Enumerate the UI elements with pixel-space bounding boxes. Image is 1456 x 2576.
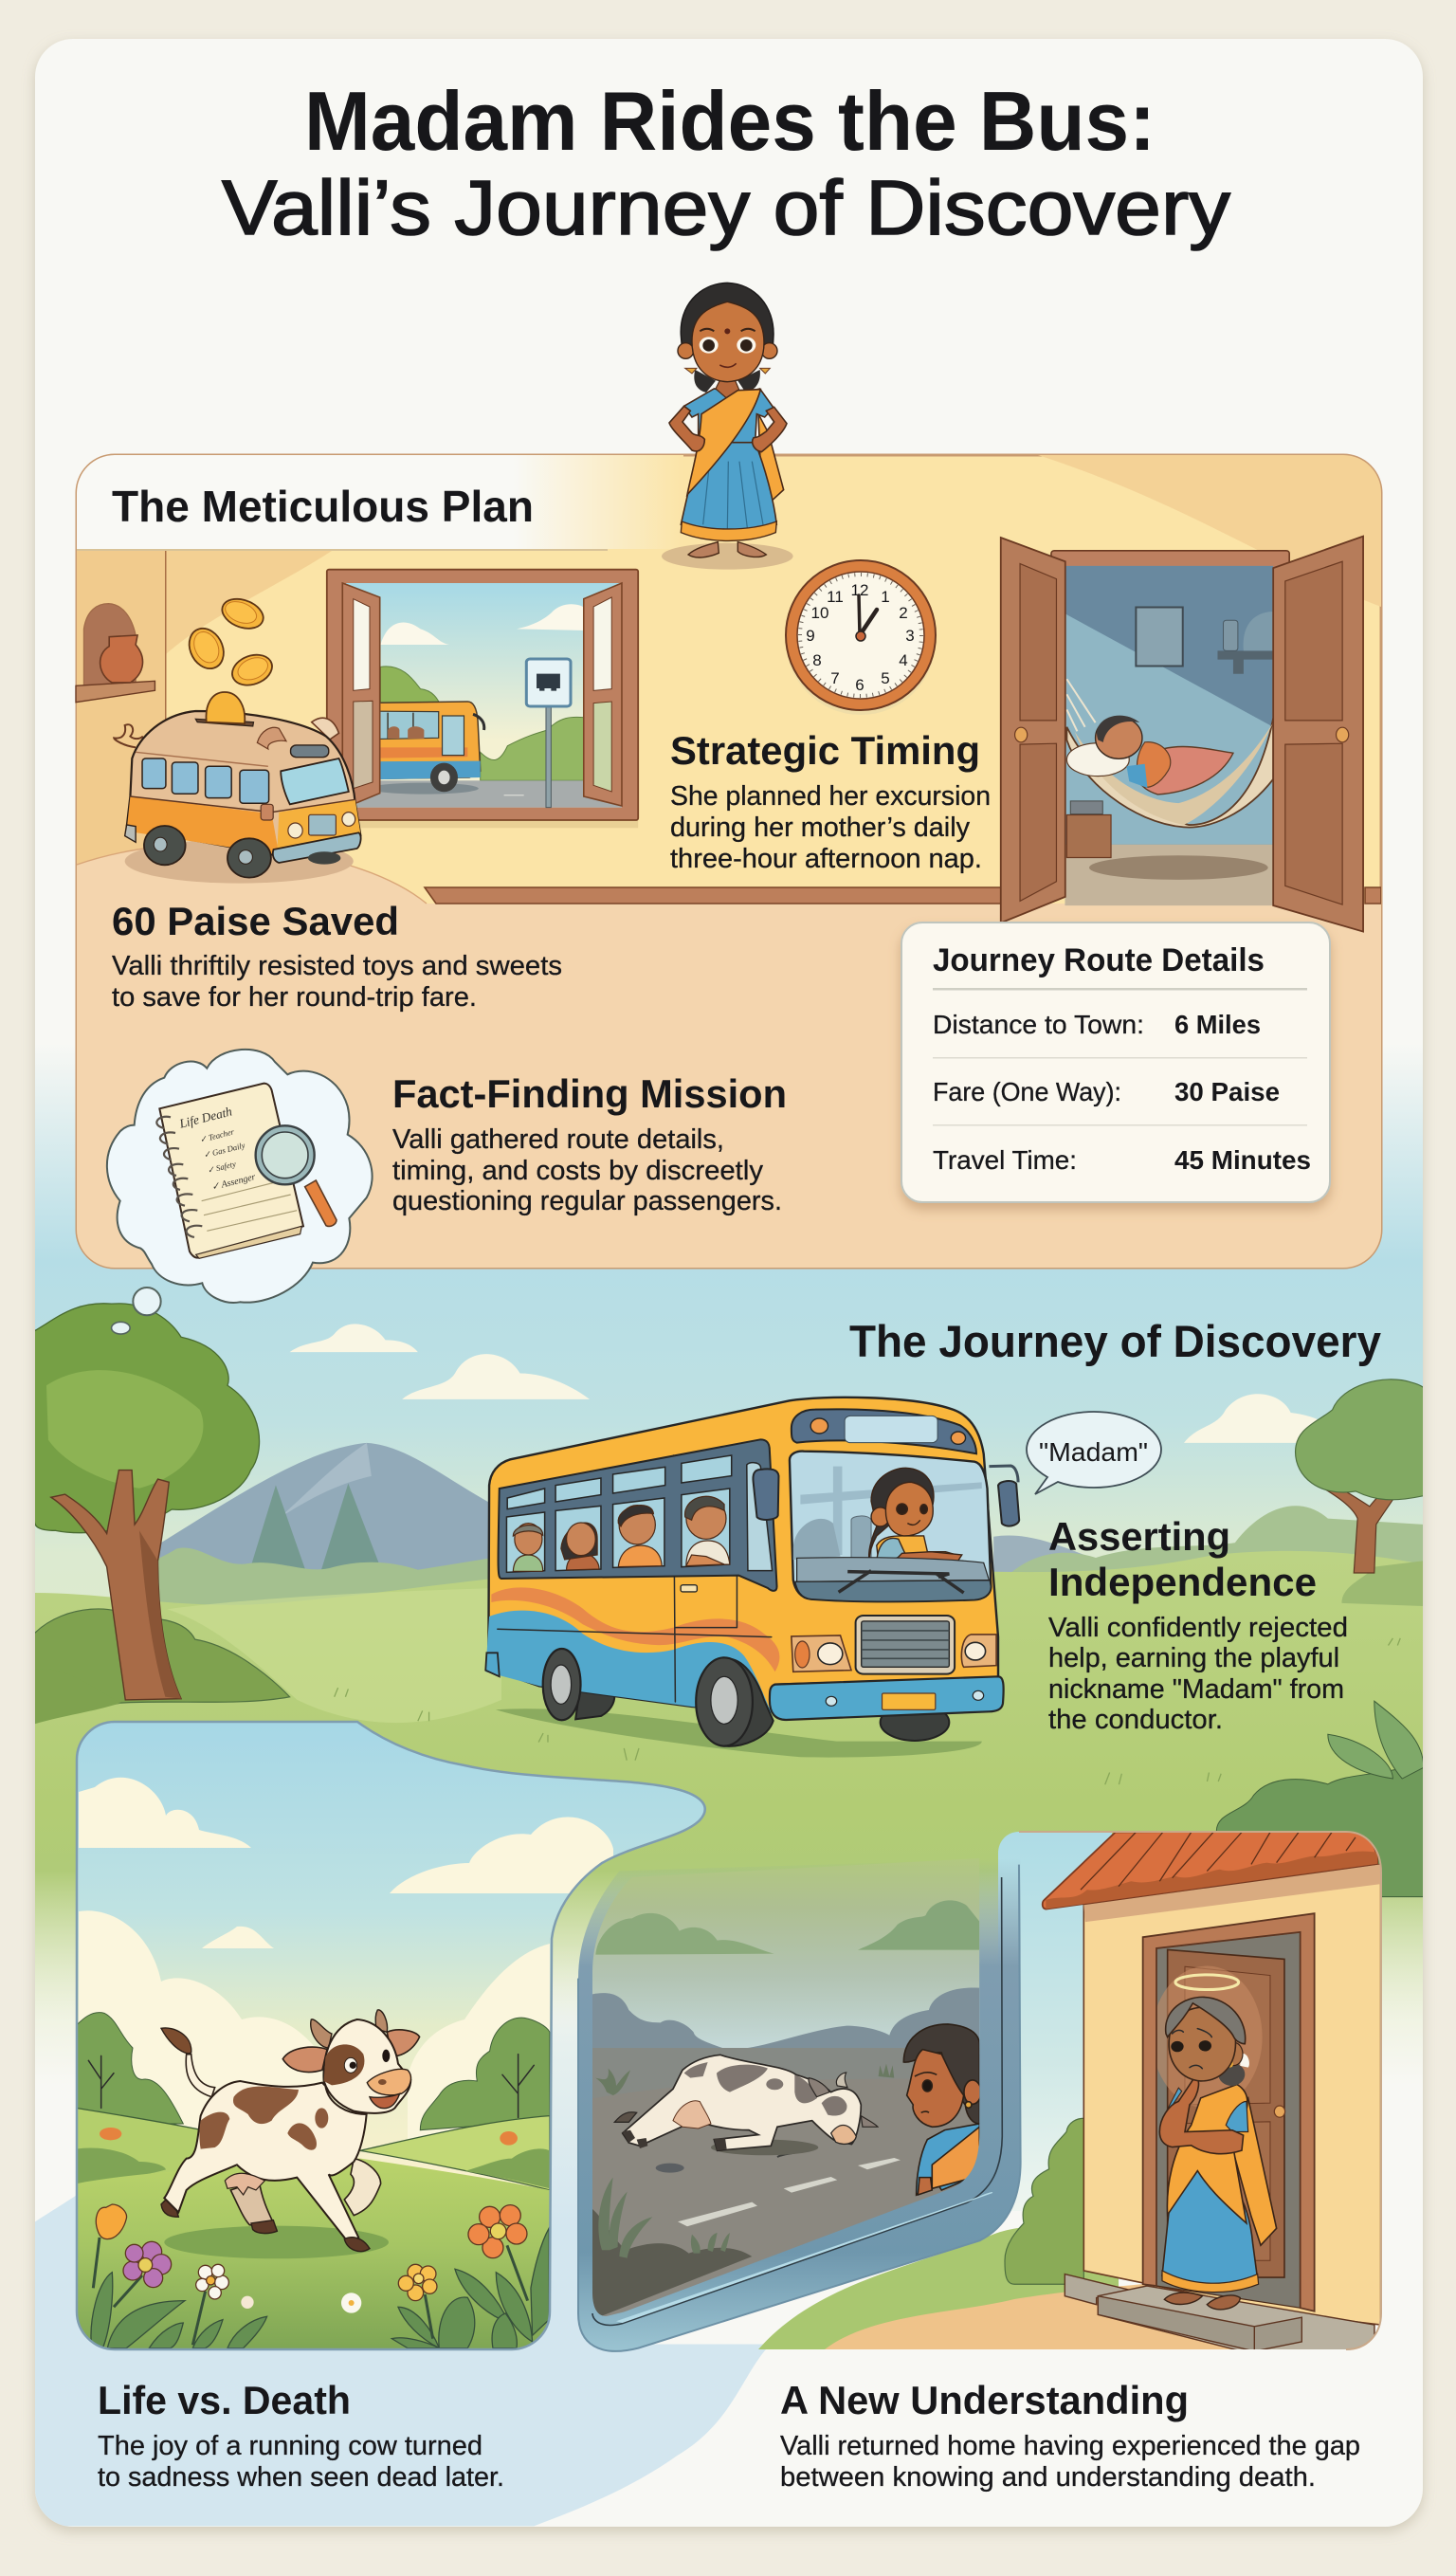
landscape scene: [34, 948, 1424, 2526]
stems and leaves: [91, 2228, 549, 2348]
icon: thought cloud with notebook and magnifier: ✓ Assenger: [210, 1172, 257, 1193]
icon: falling coins: [184, 594, 279, 691]
title: [222, 74, 1230, 251]
text block: strategic timing: during her mother’s daily: [670, 813, 970, 843]
icon: thought cloud with notebook and magnifier: ✓ Safety: [207, 1159, 237, 1175]
roof: [1043, 1831, 1377, 1909]
row: distance: [933, 1010, 1261, 1039]
right mirror: [989, 1466, 1018, 1482]
flowers: [96, 2204, 127, 2239]
title: Valli’s Journey of Discovery: [222, 165, 1230, 251]
text block: fact-finding mission: timing, and costs by discreetly: [392, 1156, 764, 1186]
icon: wall clock: 1: [881, 588, 890, 606]
icon: wall clock: 11: [827, 588, 844, 606]
text block: asserting independence: help, earning the playful: [1048, 1643, 1339, 1673]
right bushes: [1342, 1561, 1424, 1606]
clouds: [290, 1324, 1346, 1443]
text block: life vs death: [98, 2378, 504, 2493]
small bus in the window: [354, 702, 481, 779]
hammock: [1066, 679, 1096, 731]
text block: fact-finding mission: Fact-Finding Mission: [392, 1071, 787, 1116]
panel: house with worried mother: [758, 1831, 1381, 2351]
clouds: [79, 1778, 613, 2143]
panel: journey route details: [901, 923, 1330, 1202]
row: time: [933, 1145, 1311, 1175]
destination panel: [792, 1409, 976, 1453]
text block: strategic timing: [670, 728, 991, 874]
text block: a new understanding: A New Understanding: [780, 2378, 1189, 2422]
steps: [1065, 2275, 1140, 2305]
fallen cow: [614, 2055, 878, 2155]
window with bus stop view: [327, 570, 638, 828]
left column: [77, 551, 166, 892]
heading: journey of discovery: The Journey of Discovery: [849, 1316, 1381, 1366]
text block: 60 paise saved: [112, 899, 562, 1013]
text block: strategic timing: three-hour afternoon nap.: [670, 844, 982, 874]
doorway with mother napping in hammock: [1001, 537, 1363, 932]
heading: meticulous plan: The Meticulous Plan: [112, 482, 534, 531]
icon: wall clock: 2: [899, 604, 908, 622]
icon: thought cloud with notebook and magnifier: ✓ Gas Daily: [203, 1141, 246, 1160]
icon: wall clock: 4: [899, 651, 908, 669]
hair and braids: [681, 283, 774, 354]
text block: fact-finding mission: questioning regular passengers.: [392, 1186, 782, 1216]
panel: the meticulous plan: [77, 455, 1381, 1268]
icon: wall clock: 6: [855, 676, 864, 694]
wheels: [543, 1649, 581, 1720]
icon: wall clock: 7: [830, 669, 840, 687]
wall: [1083, 1864, 1381, 2325]
panel: bus window view of the dead cow: [569, 1858, 1021, 2351]
bush: [1005, 2118, 1083, 2284]
top-right dark bush: [1216, 1701, 1424, 1897]
left tree: [34, 1304, 290, 1724]
icon: wall clock: 3: [905, 627, 915, 645]
cow: [161, 2010, 420, 2252]
peach floor: [77, 844, 1381, 1268]
Valli looking out: [903, 2024, 981, 2195]
text block: asserting independence: the conductor.: [1048, 1705, 1223, 1735]
illustration: yellow bus with Valli: [485, 1398, 1019, 1758]
trees and hills: [76, 2013, 183, 2124]
row: time: 45 Minutes: [1174, 1145, 1311, 1175]
grass field: [35, 1551, 1423, 2019]
skirting board: [425, 887, 1014, 904]
door: [1156, 1932, 1301, 2308]
arms: [669, 406, 704, 451]
window panes: [506, 1455, 773, 1572]
bodice: [684, 389, 774, 443]
text block: strategic timing: Strategic Timing: [670, 728, 980, 773]
right shutter: [584, 583, 622, 806]
row: distance: Distance to Town:: [933, 1010, 1144, 1039]
sleeper: [1066, 743, 1129, 776]
text block: asserting independence: Asserting: [1048, 1514, 1230, 1559]
passengers: [513, 1496, 730, 1571]
title: Madam Rides the Bus:: [304, 74, 1156, 168]
icon: thought cloud with notebook and magnifier: Life Death: [177, 1104, 234, 1131]
right tree: [1296, 1379, 1430, 1573]
row: fare: Fare (One Way):: [933, 1077, 1121, 1106]
icon: wall clock: 5: [881, 669, 890, 687]
icon: wall clock: 8: [812, 651, 822, 669]
icon: thought cloud with notebook and magnifier: ✓ Teacher: [199, 1126, 236, 1144]
right door leaf: [1273, 537, 1363, 932]
road dashes: [678, 2158, 901, 2226]
grille: [856, 1616, 955, 1674]
left shutter: [342, 583, 380, 808]
text block: 60 paise saved: to save for her round-trip fare.: [112, 982, 477, 1013]
text block: asserting independence: [1048, 1514, 1348, 1735]
icon: wall clock: 9: [806, 627, 815, 645]
row: time: Travel Time:: [933, 1145, 1077, 1175]
text block: fact-finding mission: [392, 1071, 787, 1216]
panel: running cow: [76, 1722, 721, 2357]
text block: fact-finding mission: Valli gathered route details,: [392, 1124, 724, 1155]
icon: wall clock: 12: [851, 581, 868, 599]
text block: a new understanding: [780, 2378, 1360, 2493]
row: fare: [933, 1077, 1280, 1106]
text block: asserting independence: Valli confidently rejected: [1048, 1613, 1348, 1643]
row: fare: 30 Paise: [1174, 1077, 1280, 1106]
coin dropping into the slot: [206, 692, 245, 723]
windshield: [790, 1452, 991, 1601]
nightstand: [1066, 815, 1111, 858]
grass tufts: [335, 1638, 1400, 1784]
headlights: [792, 1635, 851, 1672]
feet: [688, 542, 766, 557]
icon: thought cloud with notebook and magnifier: [107, 1050, 373, 1315]
text block: life vs death: to sadness when seen dead later.: [98, 2462, 504, 2493]
draped end of sari: [758, 414, 784, 500]
text block: 60 paise saved: Valli thriftily resisted toys and sweets: [112, 951, 562, 981]
driver Valli: [869, 1468, 962, 1567]
text block: strategic timing: She planned her excursion: [670, 781, 991, 812]
framed picture and shelf: [1136, 607, 1183, 666]
bus stop sign: [546, 704, 551, 808]
upper-right wedge: [1038, 455, 1381, 607]
woman: [1166, 2087, 1183, 2110]
text block: life vs death: Life vs. Death: [98, 2378, 351, 2422]
left door leaf: [1001, 538, 1065, 923]
icon: wall clock: 10: [811, 604, 828, 622]
character: young Valli: [662, 283, 793, 570]
text block: asserting independence: Independence: [1048, 1560, 1317, 1604]
bumper: [770, 1676, 1004, 1720]
icon: piggy bank bus: [114, 692, 361, 884]
cow head: [311, 2019, 332, 2048]
skirt: [681, 443, 776, 536]
text block: life vs death: The joy of a running cow turned: [98, 2431, 482, 2461]
head: [678, 343, 694, 358]
text block: a new understanding: Valli returned home having experienced the gap: [780, 2431, 1360, 2461]
speech bubble: Madam: [1027, 1412, 1161, 1494]
halo: [1175, 1975, 1239, 1990]
text block: 60 paise saved: 60 Paise Saved: [112, 899, 399, 943]
icon: shelf with clay pot: [76, 604, 155, 703]
icon: wall clock: [786, 560, 936, 715]
left side mirror: [753, 1469, 778, 1520]
text block: asserting independence: nickname "Madam" from: [1048, 1674, 1344, 1705]
speech bubble: Madam: "Madam": [1039, 1437, 1148, 1467]
bottom-left water: [35, 2196, 766, 2526]
row: distance: 6 Miles: [1174, 1010, 1261, 1039]
panel: journey route details: Journey Route Details: [933, 942, 1265, 978]
dashboard and wipers: [797, 1558, 989, 1581]
sash: [687, 390, 760, 495]
mountains: [112, 1443, 1424, 1616]
text block: a new understanding: between knowing and understanding death.: [780, 2462, 1316, 2493]
